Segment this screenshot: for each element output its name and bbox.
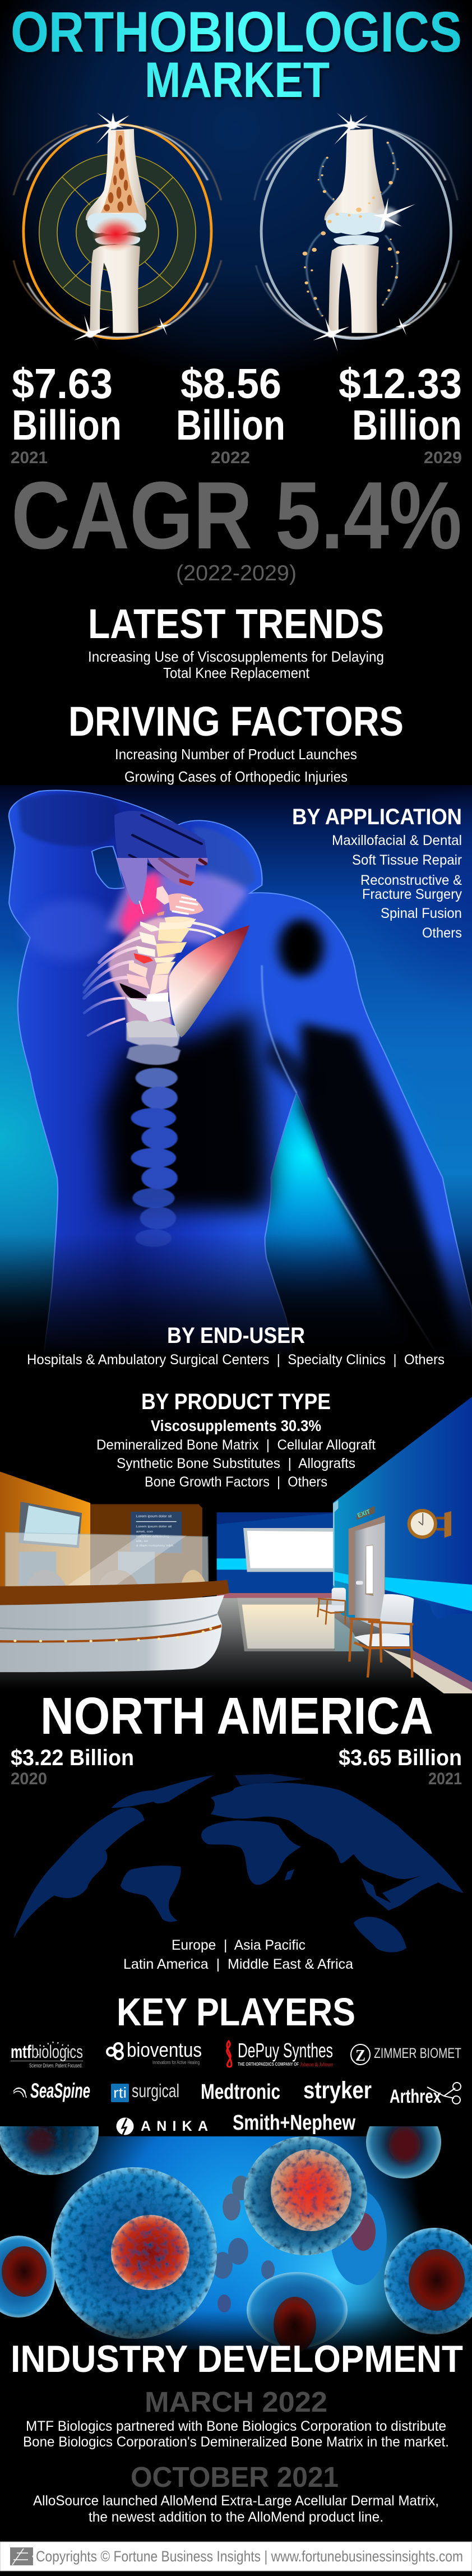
list: Hospitals & Ambulatory Surgical Centers | Specialty Clinics | Others: [27, 1352, 445, 1368]
window: [243, 1528, 335, 1572]
stat 2021: 2021: [11, 449, 48, 467]
stat 2021: [339, 1746, 462, 1788]
cell top left: [0, 2126, 99, 2175]
march 2022 entry: MTF Biologics partnered with Bone Biologics Corporation to distribute: [26, 2418, 446, 2434]
section: driving factors: [68, 698, 404, 785]
section: by end-user: [27, 1323, 445, 1368]
cell large left: [51, 2167, 217, 2339]
other regions: Latin America | Middle East & Africa: [123, 1956, 353, 1972]
logo: anika: [117, 2117, 208, 2135]
logo: zimmer biomet: [351, 2044, 461, 2065]
panel highlight: [333, 1500, 338, 1587]
logo: medtronic: Medtronic: [201, 2080, 280, 2104]
by application: Soft Tissue Repair: [352, 852, 462, 868]
body text: Increasing Use of Viscosupplements for Delaying: [88, 648, 384, 665]
rug: [237, 1598, 335, 1651]
section: by product type: [96, 1389, 376, 1490]
orange wall: [0, 1472, 90, 1608]
stat 2029: $12.33: [339, 360, 462, 407]
march 2022 entry: Bone Biologics Corporation's Demineralized Bone Matrix in the market.: [23, 2434, 449, 2450]
stat 2020: 2020: [11, 1770, 47, 1788]
stat 2021: [11, 360, 122, 467]
scapula: [169, 925, 249, 1037]
cell large right: [244, 2136, 367, 2255]
logo: bioventus: bioventus: [127, 2038, 202, 2061]
title: MARKET: [145, 52, 330, 108]
illustration: hospital reception: [0, 1397, 472, 1803]
notice board: Lorem ipsum dolor sit: [136, 1515, 172, 1518]
by application: Maxillofacial & Dental: [332, 833, 462, 848]
panel: body illustration: [0, 785, 472, 1358]
logo: seaspine: SeaSpine: [30, 2079, 90, 2102]
logo: mtf biologics: [11, 2042, 83, 2069]
cell bottom centre: [247, 2272, 348, 2353]
heading: BY END-USER: [167, 1323, 305, 1348]
chair large: [349, 1594, 414, 1678]
clock: [408, 1509, 451, 1539]
pain glow: [119, 871, 163, 938]
logo: mtf biologics: Science Driven. Patient Focused.: [29, 2063, 82, 2069]
blue background: [0, 785, 472, 1357]
ribs: [84, 936, 144, 1036]
human back silhouette: [9, 790, 472, 1356]
logo: depuy synthes: [227, 2039, 333, 2068]
stat 2022: 2022: [211, 449, 250, 467]
illustration: injured knee joint: [13, 113, 221, 350]
header gradient background: [0, 0, 472, 393]
counter: [0, 1580, 229, 1672]
october 2021 entry: AlloSource launched AlloMend Extra-Large Acellular Dermal Matrix,: [33, 2493, 439, 2509]
heading: KEY PLAYERS: [117, 1990, 355, 2034]
segment list: [96, 1437, 376, 1490]
glow background: [53, 2136, 427, 2349]
body text: [88, 648, 384, 681]
dark and red gaps between ribs: [119, 983, 147, 998]
skirting right: [383, 1650, 472, 1693]
monitor: [18, 1502, 82, 1548]
stat 2020: $3.22 Billion: [11, 1746, 134, 1770]
leading segment: Viscosupplements 30.3%: [151, 1417, 321, 1434]
segment list: Bone Growth Factors | Others: [145, 1474, 327, 1490]
section: north america: [11, 1687, 464, 1972]
skirting: [217, 1593, 332, 1598]
section: industry development: [11, 2338, 463, 2525]
march 2022 entry: MARCH 2022: [145, 2386, 327, 2418]
heading: BY PRODUCT TYPE: [141, 1389, 331, 1414]
stat 2021: $3.65 Billion: [339, 1746, 462, 1770]
logo: rti surgical: [111, 2080, 179, 2102]
illustration: healed knee joint: [254, 113, 459, 352]
logo: rti surgical: rti: [113, 2084, 127, 2101]
thoracic vertebrae: [126, 918, 196, 1037]
chair small: [318, 1588, 346, 1624]
by application: Spinal Fusion: [381, 906, 462, 921]
stat 2020: [11, 1746, 134, 1788]
floor reflection: [335, 1618, 364, 1651]
stat 2029: 2029: [424, 449, 462, 467]
body text: Increasing Number of Product Launches: [115, 746, 357, 763]
hospital back-left: [0, 1472, 229, 1672]
brown wall: [90, 1504, 202, 1608]
service kiosks and glass screen: [6, 1532, 209, 1591]
CAGR: (2022-2029): [176, 561, 297, 585]
door: [349, 1516, 385, 1630]
exit sign: [357, 1506, 374, 1520]
panel: cells illustration: [0, 2126, 472, 2353]
corridor cyan stripe: [217, 1558, 248, 1569]
stat 2021: Billion: [12, 401, 122, 449]
cell bottom left: [0, 2236, 55, 2318]
globe map: [13, 1774, 464, 1952]
lower vertebrae: [127, 1022, 181, 1247]
panel: market size stats: [11, 360, 462, 585]
stat 2021: 2021: [428, 1770, 462, 1788]
body text: [115, 746, 357, 785]
by application: Others: [422, 925, 462, 941]
stat 2029: [339, 360, 462, 467]
segment list: Synthetic Bone Substitutes | Allografts: [117, 1456, 355, 1471]
logo: bioventus: Innovations for Active Healing: [152, 2060, 200, 2065]
notice board: d diam nonummy nibh: [136, 1544, 174, 1548]
notice board: Lorem ipsum dolor sit: [136, 1525, 172, 1529]
heading: DRIVING FACTORS: [68, 698, 404, 745]
logo: bioventus: [107, 2038, 202, 2065]
wall wave: [384, 1590, 472, 1682]
fingers: [116, 858, 147, 904]
bottom fade: [0, 1234, 472, 1358]
logo: mtf biologics: mtfbiologics: [11, 2042, 83, 2062]
spine, ribs and pain glow: [84, 858, 249, 1037]
panel: header: [0, 0, 472, 393]
october 2021 entry: [33, 2461, 439, 2525]
section: key players: [11, 1990, 461, 2135]
logo: depuy synthes: THE ORTHOPAEDICS COMPANY OF: [238, 2062, 299, 2067]
floor: [0, 1597, 472, 1803]
stat 2022: [176, 360, 285, 467]
logo: anika: ANIKA: [141, 2118, 208, 2134]
logo: rti surgical: surgical: [132, 2080, 179, 2101]
notice board: [131, 1512, 182, 1553]
neck glow: [107, 871, 248, 944]
title: [11, 0, 462, 108]
logo: stryker: stryker: [303, 2077, 372, 2104]
body text: Growing Cases of Orthopedic Injuries: [124, 768, 348, 785]
logo: depuy synthes: DePuy Synthes: [238, 2039, 333, 2062]
logo: zimmer biomet: Z: [355, 2047, 365, 2065]
heading: LATEST TRENDS: [88, 601, 384, 647]
stat 2022: Billion: [176, 401, 285, 449]
logo: arthrex: Arthrex: [390, 2086, 441, 2107]
by application: Fracture Surgery: [362, 887, 462, 902]
icon: fortune business insights logo: [10, 2547, 33, 2565]
section: latest trends: [88, 601, 384, 681]
corridor, wall, door and chairs: [217, 1512, 364, 1651]
notice board: elit, se: [136, 1539, 149, 1543]
back wall: [217, 1512, 335, 1594]
cell bottom right: [384, 2228, 472, 2334]
right wall: [333, 1397, 472, 1684]
cell top right: [366, 2126, 441, 2178]
stat 2021: $7.63: [12, 360, 113, 407]
logo: depuy synthes: Johnson & Johnson: [300, 2061, 333, 2068]
exit sign: EXIT: [357, 1508, 371, 1519]
lower fade: [1, 2312, 472, 2353]
wall stripes: [335, 1572, 472, 1611]
notice board: sectetuer adipiscing: [136, 1535, 169, 1538]
march 2022 entry: [23, 2386, 449, 2450]
segment list: Demineralized Bone Matrix | Cellular Allograft: [96, 1437, 376, 1453]
october 2021 entry: OCTOBER 2021: [131, 2461, 339, 2493]
body text: Total Knee Replacement: [163, 664, 310, 681]
notice board: amet, con: [136, 1530, 153, 1534]
by application: Reconstructive &: [360, 872, 462, 888]
logo: seaspine: [13, 2079, 90, 2102]
other regions: Europe | Asia Pacific: [172, 1937, 306, 1953]
footer: [0, 2542, 472, 2571]
by application: [292, 805, 462, 941]
heading: NORTH AMERICA: [40, 1687, 433, 1745]
october 2021 entry: the newest addition to the AlloMend product line.: [89, 2509, 383, 2525]
bright ribcage mass: [108, 918, 189, 1037]
logo: smith nephew: Smith+Nephew: [233, 2111, 355, 2135]
background small cells: [200, 2176, 387, 2312]
cervical vertebrae: [156, 886, 203, 925]
other regions: [123, 1937, 353, 1972]
stat 2022: $8.56: [181, 360, 281, 407]
